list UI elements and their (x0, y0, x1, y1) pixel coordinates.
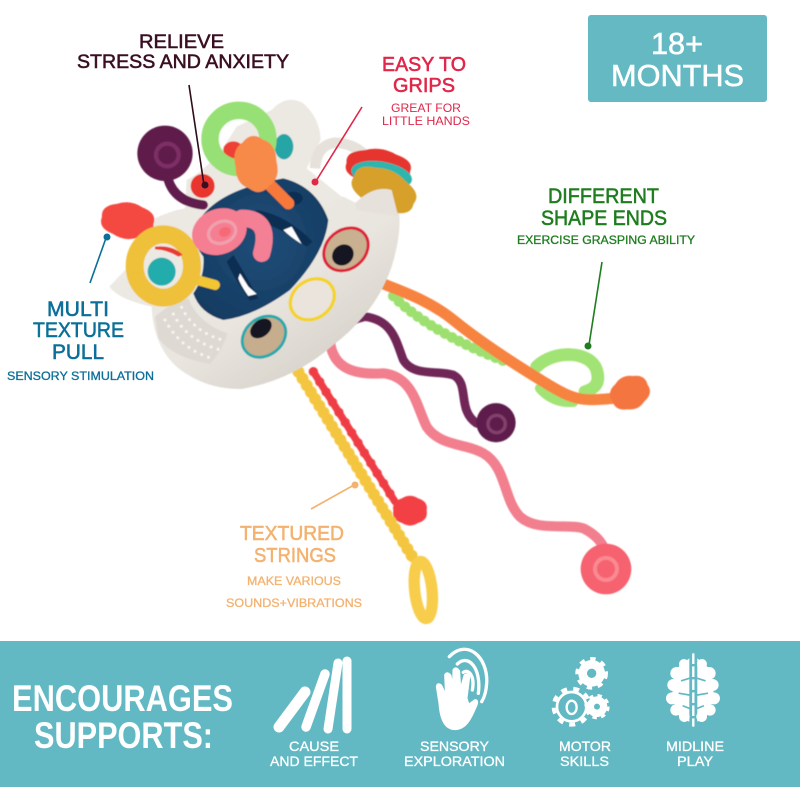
label: midline play: PLAY (677, 753, 714, 769)
hole: teal ring (234, 308, 294, 366)
age badge (588, 15, 767, 102)
green string with loop (393, 296, 598, 402)
badge months: MONTHS (611, 58, 744, 93)
textured body line two: SOUNDS+VIBRATIONS (226, 596, 362, 610)
yellow ring (135, 234, 215, 298)
handle arc (315, 143, 365, 168)
back shell and top ear (133, 100, 350, 290)
orange string with flower (378, 282, 655, 416)
icon: gears (554, 659, 608, 725)
band panel (0, 641, 800, 787)
label: sensory exploration: SENSORY (420, 738, 490, 754)
purple disc (137, 126, 193, 181)
purple disc stalk (168, 180, 203, 205)
label: motor skills (559, 738, 611, 769)
strings heading: STRINGS (254, 545, 336, 567)
relieve pointer (189, 85, 204, 185)
label: midline play (666, 738, 724, 769)
label: sensory exploration (404, 738, 505, 769)
badge panel (588, 15, 767, 102)
red textured string (313, 372, 427, 525)
textured body line one: MAKE VARIOUS (247, 574, 341, 588)
badge age: 18+ (651, 26, 703, 61)
callout: relieve stress (77, 32, 289, 188)
relieve dot (202, 182, 208, 188)
band heading line two: SUPPORTS: (34, 715, 213, 756)
relieve heading: RELIEVE (139, 32, 224, 53)
pink string with disc (330, 342, 631, 594)
hole: red ring (315, 219, 377, 280)
grips heading: GRIPS (393, 75, 455, 97)
orange flower (231, 133, 281, 195)
textured dot (352, 482, 358, 488)
easy pointer (316, 107, 362, 181)
textured heading: TEXTURED (240, 523, 344, 545)
navy dome (193, 178, 328, 320)
multi heading: MULTI (47, 298, 109, 321)
pink disc (185, 200, 254, 263)
left ear and main shell (109, 191, 400, 389)
label: cause and effect: CAUSE (289, 738, 339, 754)
orange stalk (270, 185, 288, 203)
shape ends dot (584, 342, 592, 350)
multi pointer (90, 238, 106, 283)
shape ends heading: SHAPE ENDS (541, 207, 667, 230)
multi dot (104, 234, 110, 240)
easy heading: EASY TO (382, 54, 466, 76)
label: cause and effect (270, 738, 358, 769)
callout: multi texture (7, 234, 154, 383)
label: midline play: MIDLINE (666, 738, 724, 754)
red flower (99, 199, 156, 243)
teal knob (275, 134, 293, 159)
callout: textured strings (226, 482, 362, 610)
pull heading: PULL (52, 341, 104, 364)
textured grip (155, 298, 227, 364)
slit highlights (238, 227, 302, 296)
icon: brain (666, 653, 720, 727)
label: cause and effect: AND EFFECT (270, 753, 358, 769)
icon: hand with waves (437, 649, 487, 729)
multi body: SENSORY STIMULATION (7, 369, 154, 383)
red peek (223, 141, 243, 159)
hole: yellow ring (282, 270, 342, 328)
easy body line two: LITTLE HANDS (382, 114, 470, 128)
label: motor skills: SKILLS (560, 753, 609, 769)
dome slits (227, 192, 313, 301)
toy body (99, 100, 423, 389)
label: sensory exploration: EXPLORATION (404, 753, 505, 769)
easy body line one: GREAT FOR (391, 101, 461, 115)
pink stalk (242, 218, 264, 253)
label: motor skills: MOTOR (559, 738, 611, 754)
callout: easy to grip (312, 54, 470, 186)
purple string with disc (355, 317, 516, 442)
icon: dominoes (279, 661, 347, 729)
pull strings (298, 282, 655, 619)
shape ends body: EXERCISE GRASPING ABILITY (517, 233, 695, 247)
yellow textured string (298, 372, 435, 619)
easy dot (312, 178, 318, 186)
callout: shape ends (517, 185, 695, 350)
shape ends pointer (589, 262, 602, 345)
different heading: DIFFERENT (548, 185, 659, 208)
texture heading: TEXTURE (33, 319, 124, 342)
encourages band (0, 641, 800, 787)
flower stack (344, 145, 423, 223)
textured pointer (311, 485, 354, 509)
relieve subheading: STRESS AND ANXIETY (77, 52, 289, 73)
band heading line one: ENCOURAGES (12, 678, 233, 719)
green ring (210, 110, 268, 168)
red knob (191, 174, 215, 198)
